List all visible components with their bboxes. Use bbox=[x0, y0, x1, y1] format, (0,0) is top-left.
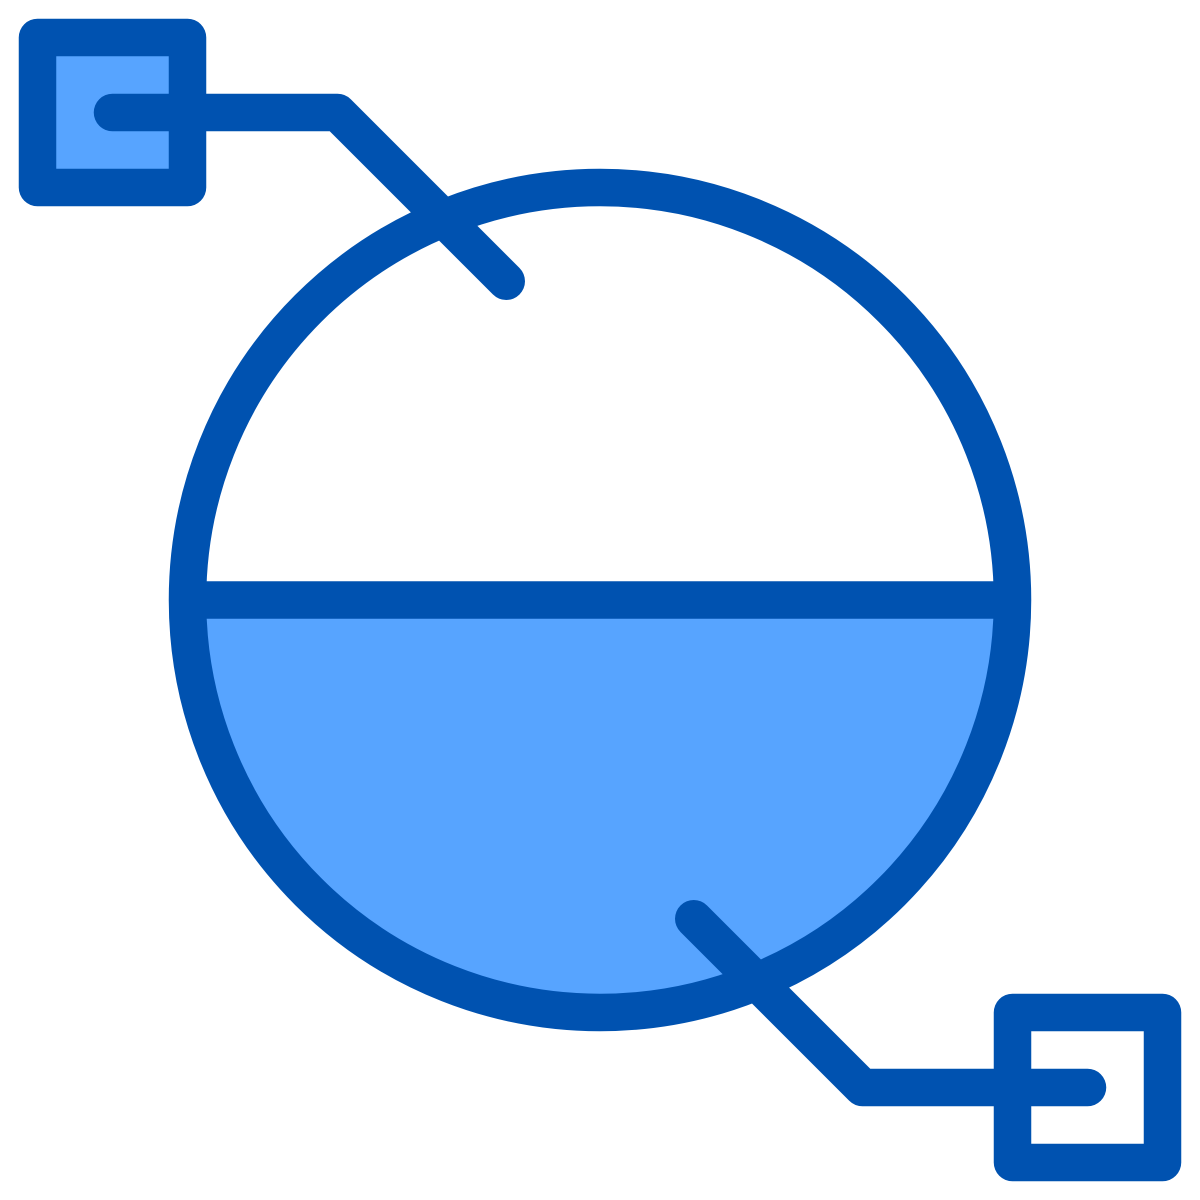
bottom-right square bbox=[1012, 1012, 1162, 1162]
circle outline bbox=[188, 188, 1012, 1012]
top-left square bbox=[38, 38, 188, 188]
horizontal divider bbox=[188, 581, 1012, 619]
top-left connector bbox=[112, 112, 506, 281]
lower half fill of circle bbox=[188, 600, 1012, 1012]
bottom-right connector bbox=[694, 919, 1088, 1088]
